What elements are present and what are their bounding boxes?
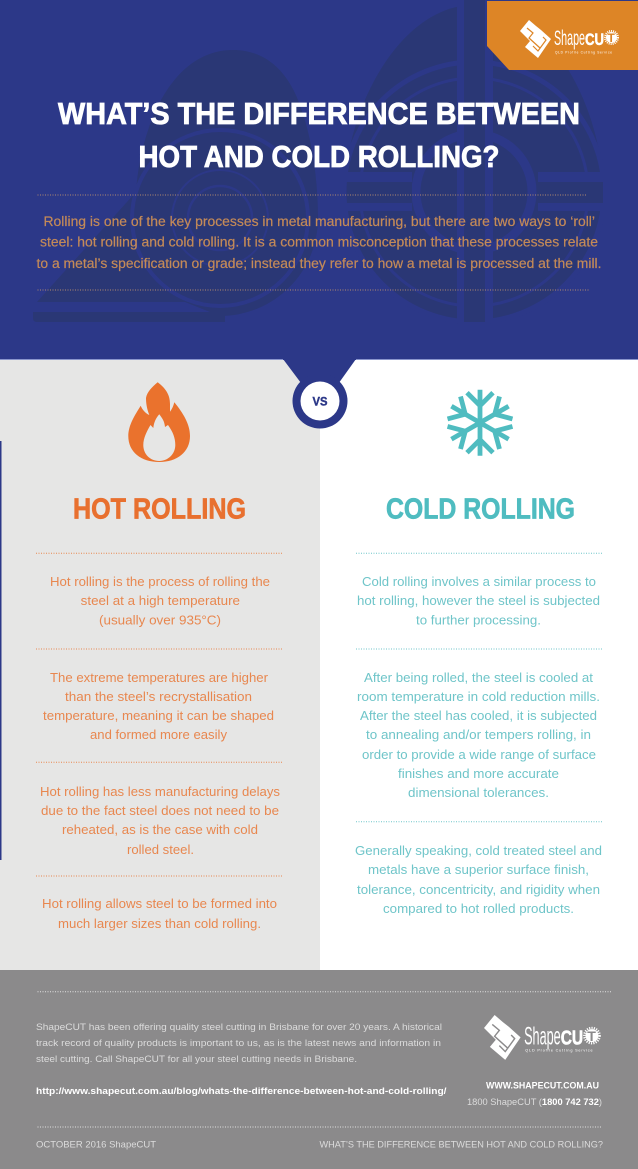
footer date: OCTOBER 2016 ShapeCUT xyxy=(36,1140,156,1151)
cold text block 2: to annealing and/or tempers rolling, in xyxy=(366,727,591,742)
cold text block 3: compared to hot rolled products. xyxy=(383,901,574,916)
footer title: WHAT’S THE DIFFERENCE BETWEEN HOT AND COLD ROLLING? xyxy=(320,1140,603,1151)
footer logo xyxy=(484,1015,600,1060)
cold text block 1: to further processing. xyxy=(416,612,541,628)
hot text block 3 xyxy=(40,784,280,857)
hot text block 2: and formed more easily xyxy=(90,727,228,742)
footer about text: steel cutting. Call ShapeCUT for all your steel cutting needs in Brisbane. xyxy=(36,1054,357,1065)
logo: ShapeCUT: QLD Profile Cutting Service xyxy=(555,50,612,54)
intro text: to a metal’s specification or grade; instead they refer to how a metal is processed at the mill. xyxy=(36,256,602,271)
footer logo: T xyxy=(587,1029,596,1045)
panel: header xyxy=(0,0,638,360)
footer about text xyxy=(36,1022,442,1065)
logo: ShapeCUT: CU xyxy=(585,30,604,49)
footer logo: Shape xyxy=(524,1024,561,1051)
panel: cold rolling xyxy=(320,360,638,970)
heading: cold rolling: COLD ROLLING xyxy=(386,493,575,525)
vs badge: VS xyxy=(312,396,328,408)
footer logo: QLD Profile Cutting Service xyxy=(525,1049,593,1053)
background illustration: left roller xyxy=(33,50,318,322)
cold text block 2: room temperature in cold reduction mills. xyxy=(357,689,600,704)
footer contact: WWW.SHAPECUT.COM.AU xyxy=(486,1081,599,1092)
panel: footer xyxy=(0,970,638,1169)
hot text block 1: Hot rolling is the process of rolling the xyxy=(50,574,270,589)
cold text block 3: Generally speaking, cold treated steel and xyxy=(355,843,602,858)
cold text block 1: hot rolling, however the steel is subjected xyxy=(357,593,600,608)
hot text block 2: The extreme temperatures are higher xyxy=(50,670,269,685)
hot text block 2: temperature, meaning it can be shaped xyxy=(43,708,274,723)
hot text block 1: (usually over 935°C) xyxy=(99,612,221,628)
cold text block 3: tolerance, concentricity, and rigidity when xyxy=(357,882,600,897)
cold text block 2 xyxy=(357,670,600,800)
hot text block 1 xyxy=(50,574,270,628)
hot text block 3: due to the fact steel does not need to be xyxy=(41,803,279,818)
panel: hot rolling xyxy=(0,360,320,970)
cold text block 2: finishes and more accurate xyxy=(398,766,559,781)
title: HOT AND COLD ROLLING? xyxy=(138,140,500,174)
title: WHAT’S THE DIFFERENCE BETWEEN xyxy=(58,97,580,131)
footer about text: track record of quality products is important to us, as is the latest news and information in xyxy=(36,1038,441,1049)
footer article link: http://www.shapecut.com.au/blog/whats-the-difference-between-hot-and-cold-rolling/ xyxy=(36,1086,447,1097)
logo: ShapeCUT: T xyxy=(608,31,616,45)
footer logo: CU xyxy=(561,1028,583,1050)
hot text block 2: than the steel’s recrystallisation xyxy=(65,689,252,704)
cold text block 2: dimensional tolerances. xyxy=(408,785,549,800)
footer contact xyxy=(467,1081,602,1108)
hot text block 3: Hot rolling has less manufacturing delays xyxy=(40,784,280,799)
hot text block 2 xyxy=(43,670,274,742)
intro text: Rolling is one of the key processes in metal manufacturing, but there are two ways to ‘roll’ xyxy=(44,214,595,229)
hot text block 4: Hot rolling allows steel to be formed into xyxy=(42,896,277,911)
intro text: steel: hot rolling and cold rolling. It is a common misconception that these processes relate xyxy=(40,234,598,250)
footer contact: 1800 ShapeCUT (1800 742 732) xyxy=(467,1097,602,1108)
title xyxy=(58,97,580,174)
intro text xyxy=(36,214,602,271)
vs badge xyxy=(283,359,356,428)
footer about text: ShapeCUT has been offering quality steel cutting in Brisbane for over 20 years. A historical xyxy=(36,1022,442,1033)
heading: hot rolling: HOT ROLLING xyxy=(73,493,246,525)
hot text block 4 xyxy=(42,896,277,931)
cold text block 2: order to provide a wide range of surface xyxy=(362,747,596,762)
background illustration: right roller xyxy=(340,0,608,322)
icon: snowflake xyxy=(445,390,515,456)
hot text block 3: rolled steel. xyxy=(127,842,194,857)
cold text block 2: After the steel has cooled, it is subjected xyxy=(360,708,597,723)
cold text block 1: Cold rolling involves a similar process to xyxy=(362,574,596,589)
logo badge xyxy=(487,1,638,70)
cold text block 1 xyxy=(357,574,600,628)
hot text block 4: much larger sizes than cold rolling. xyxy=(58,916,261,931)
cold text block 3 xyxy=(355,843,602,916)
logo: ShapeCUT: Shape xyxy=(554,27,585,50)
hot text block 1: steel at a high temperature xyxy=(81,593,240,608)
hot text block 3: reheated, as is the case with cold xyxy=(62,822,258,837)
cold text block 3: metals have a superior surface finish, xyxy=(368,862,589,877)
icon: flame xyxy=(128,382,190,462)
cold text block 2: After being rolled, the steel is cooled at xyxy=(364,670,593,685)
logo: ShapeCUT xyxy=(520,20,618,58)
